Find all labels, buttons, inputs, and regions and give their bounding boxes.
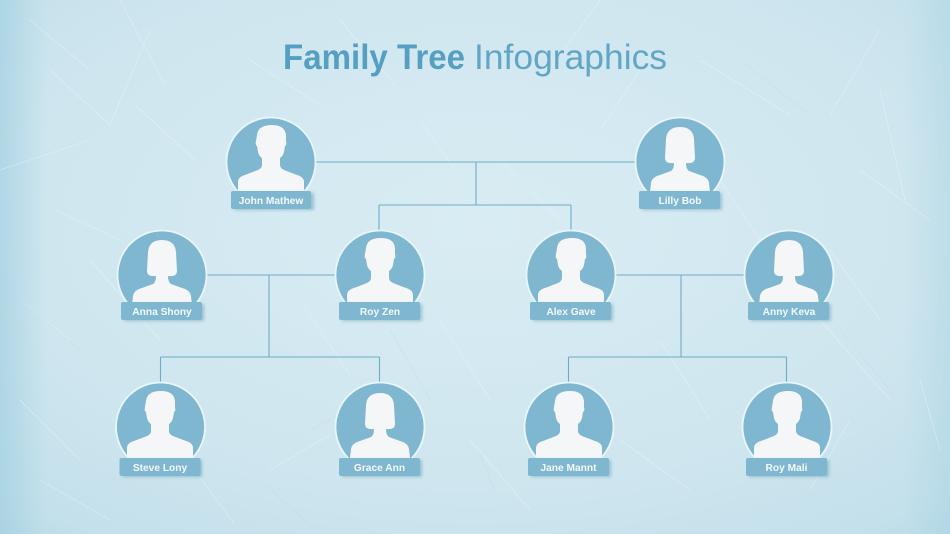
title (283, 38, 667, 77)
person: Jane Mannt (524, 382, 614, 477)
person: Steve Lony (116, 382, 205, 477)
title: Infographics (474, 38, 667, 77)
person: Grace Ann: Grace Ann (354, 463, 405, 474)
person: Jane Mannt: Jane Mannt (540, 463, 597, 474)
person: Anna Shony: Anna Shony (132, 307, 192, 318)
person: Anny Keva (744, 230, 834, 321)
person: Roy Zen: Roy Zen (360, 307, 400, 318)
person: Lilly Bob (636, 118, 724, 210)
person: Steve Lony: Steve Lony (133, 463, 188, 474)
person: Lilly Bob: Lilly Bob (658, 196, 702, 207)
person: Alex Gave: Alex Gave (546, 307, 596, 318)
person: Alex Gave (526, 230, 616, 321)
person: Anny Keva: Anny Keva (763, 307, 816, 318)
person: Roy Zen (336, 230, 424, 321)
connector lines (160, 162, 786, 383)
person: John Mathew: John Mathew (239, 196, 303, 207)
person: Anna Shony (118, 230, 206, 321)
person: John Mathew (226, 118, 316, 210)
person: Roy Mali: Roy Mali (766, 463, 808, 474)
person: Grace Ann (336, 382, 424, 477)
person: Roy Mali (742, 382, 832, 477)
title: Family Tree (283, 38, 465, 77)
